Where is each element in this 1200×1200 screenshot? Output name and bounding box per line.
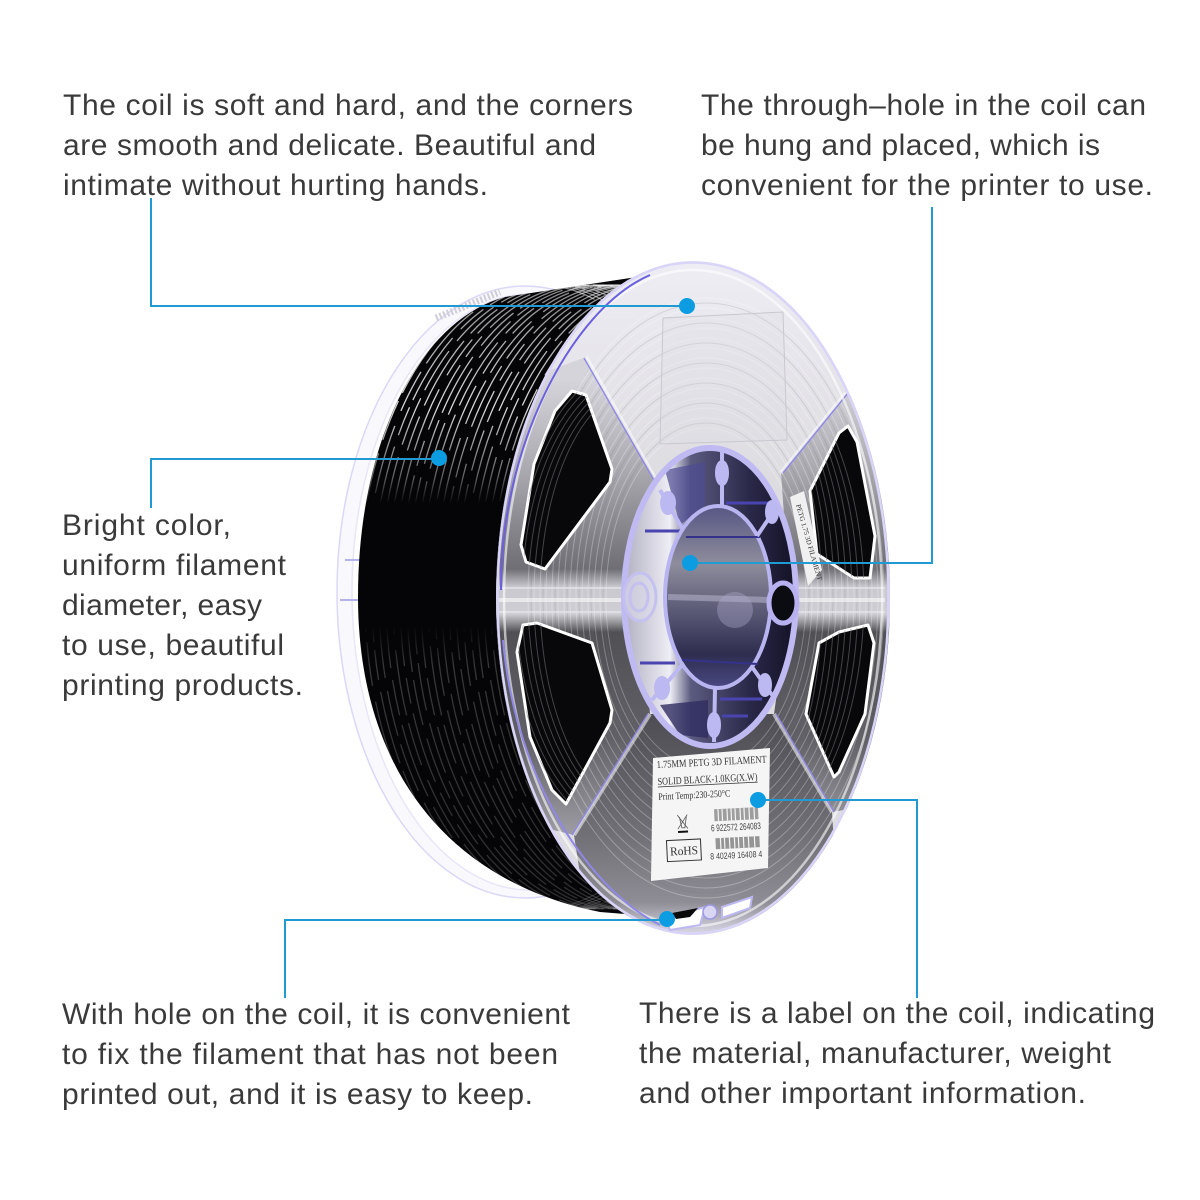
text: bright color: printing products. (62, 669, 303, 702)
hub (624, 448, 797, 746)
product label: SOLID BLACK-1.0KG(X.W) (657, 772, 758, 788)
text: bright color: Bright color, (62, 509, 231, 542)
text: through-hole: be hung and placed, which is (701, 129, 1100, 162)
text: coil soft and hard: The coil is soft and hard, and the corners (63, 89, 633, 122)
text: label on the coil: and other important information. (639, 1077, 1086, 1110)
text: label on the coil: There is a label on the coil, indicating (639, 997, 1155, 1030)
back flange (337, 286, 713, 898)
spoke ribs (497, 357, 885, 835)
purple shelf bars (640, 503, 775, 716)
leader: through-hole (682, 207, 932, 571)
text: through-hole: convenient for the printer to use. (701, 169, 1153, 202)
leader: filament (151, 450, 447, 508)
leader: coil hole (285, 911, 675, 998)
product label: Print Temp:230-250°C (658, 788, 731, 803)
flange rim (498, 262, 888, 934)
windows (517, 391, 875, 804)
front flange (470, 261, 900, 940)
leader: label (750, 792, 917, 998)
text: hole on the coil: to fix the filament that has not been (62, 1038, 558, 1071)
filament body (358, 278, 632, 914)
left boss (624, 573, 656, 621)
leader: coil edge (151, 198, 695, 314)
text: coil soft and hard: are smooth and delicate. Beautiful and (63, 129, 596, 162)
window filament streaks (518, 392, 864, 802)
barcode top (714, 807, 759, 821)
text: coil soft and hard (63, 89, 633, 202)
text: label on the coil: the material, manufacturer, weight (639, 1037, 1112, 1070)
text: bright color: uniform filament (62, 549, 287, 582)
concentric grooves (528, 370, 884, 898)
leader lines and dots (151, 198, 932, 998)
text: coil soft and hard: intimate without hurting hands. (63, 169, 488, 202)
text: through-hole (701, 89, 1153, 202)
barcode bottom (715, 836, 760, 849)
text: bright color: to use, beautiful (62, 629, 284, 662)
ring spokes with blobs (652, 450, 778, 742)
outer ring (624, 448, 796, 746)
product label: RoHS (670, 843, 698, 858)
side sticker: PETG 1.75 3D FILAMENT (794, 503, 824, 582)
text: hole on the coil: With hole on the coil, it is convenient (62, 998, 571, 1031)
text: hole on the coil: printed out, and it is easy to keep. (62, 1078, 533, 1111)
product label: 1.75MM PETG 3D FILAMENT (657, 755, 767, 771)
recycling icon (677, 815, 688, 832)
window: top left (521, 391, 612, 569)
text: label on the coil (639, 997, 1155, 1110)
spool photo illustration (337, 261, 900, 940)
text: through-hole: The through–hole in the coil can (701, 89, 1146, 122)
inner core (665, 506, 771, 688)
window: bottom right (806, 625, 874, 777)
right hole (769, 583, 797, 623)
embossed square (660, 312, 787, 444)
product label: 6 922572 264083 (711, 821, 761, 834)
bottom slots (665, 897, 752, 930)
text: hole on the coil (62, 998, 571, 1111)
window: bottom left (517, 623, 612, 804)
side band left (496, 357, 654, 835)
text: bright color (62, 509, 303, 702)
bottom sector (574, 714, 840, 940)
product label (651, 748, 772, 881)
product label: 8 40249 16408 4 (710, 849, 762, 861)
window: top right (810, 426, 875, 578)
RoHS box (666, 839, 701, 862)
text: bright color: diameter, easy (62, 589, 262, 622)
side band right (774, 393, 900, 812)
